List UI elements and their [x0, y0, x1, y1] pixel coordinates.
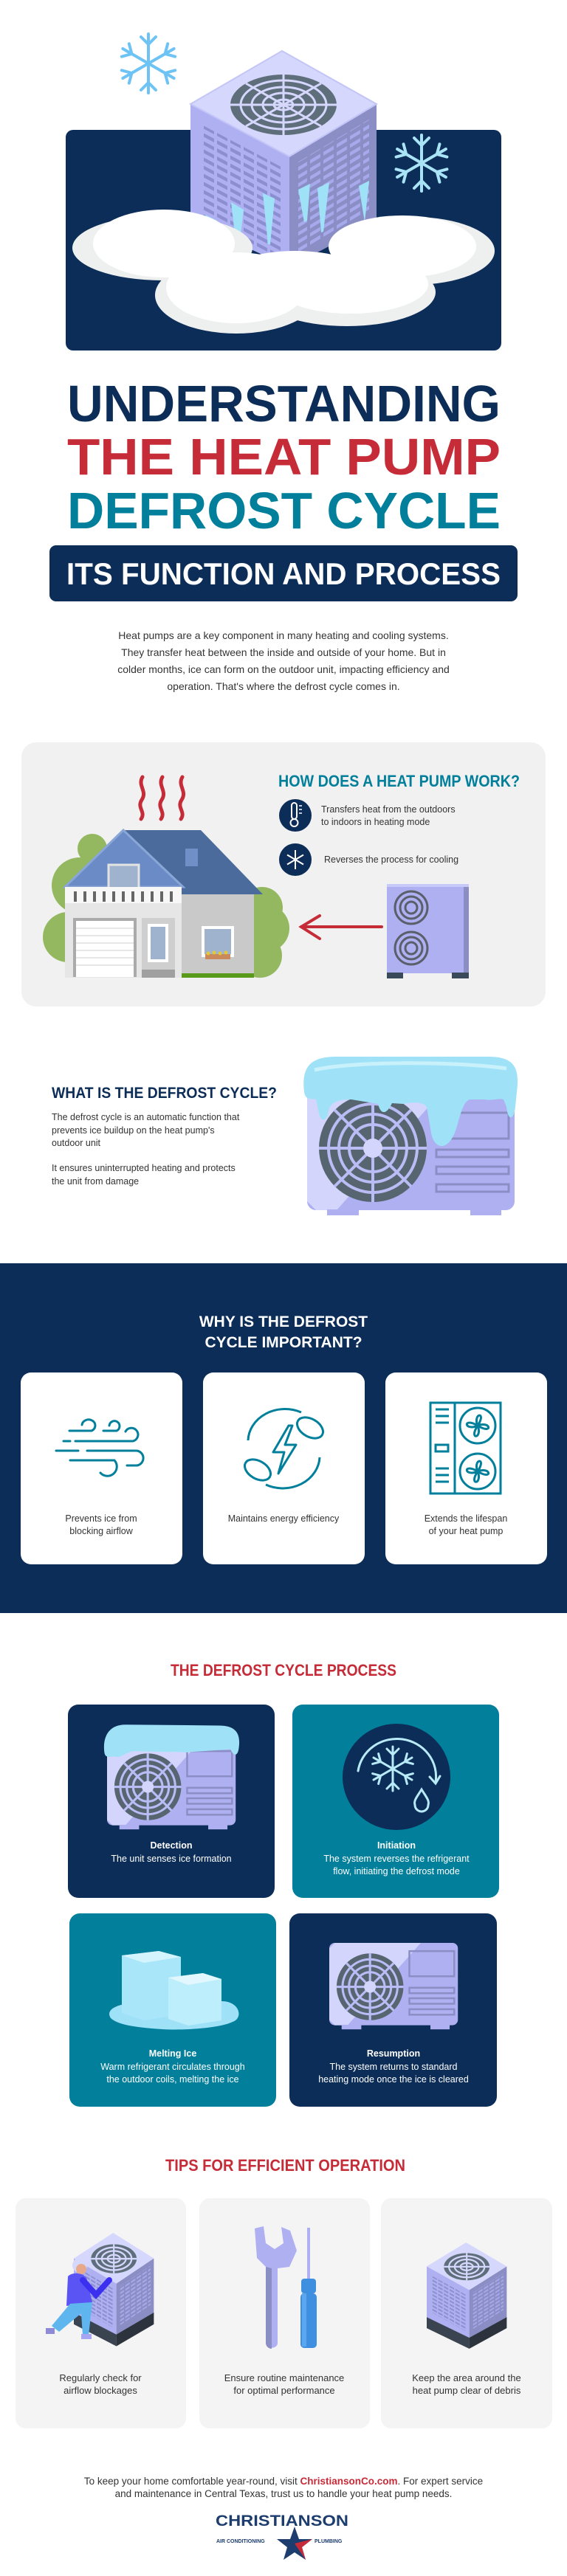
card: resumption	[289, 1913, 497, 2107]
card: tip debris	[381, 2198, 552, 2428]
footer text: and maintenance in Central Texas, trust us to handle your heat pump needs.	[115, 2488, 452, 2499]
intro text: colder months, ice can form on the outdoor unit, impacting efficiency and	[117, 663, 450, 675]
icicles	[205, 181, 369, 246]
card: airflow: Prevents ice from	[65, 1513, 137, 1524]
card: lifespan: of your heat pump	[429, 1526, 503, 1536]
illustration: unit with technician	[74, 2233, 154, 2347]
card: resumption: heating mode once the ice is cleared	[318, 2074, 469, 2085]
hero: heat pump unit	[190, 51, 377, 267]
title: THE HEAT PUMP	[67, 428, 501, 486]
card: tip airflow	[16, 2198, 186, 2428]
heading: tips: TIPS FOR EFFICIENT OPERATION	[165, 2156, 405, 2175]
illustration: wrench and screwdriver	[255, 2226, 317, 2349]
subtitle banner: ITS FUNCTION AND PROCESS	[66, 556, 501, 591]
card: tip debris: heat pump clear of debris	[413, 2385, 521, 2396]
text: transfers heat	[321, 804, 456, 827]
card: lifespan: Extends the lifespan	[425, 1513, 507, 1524]
card: tip maintenance	[199, 2198, 370, 2428]
heading: CYCLE IMPORTANT?	[205, 1334, 362, 1351]
logo: PLUMBING	[315, 2539, 343, 2544]
logo: AIR CONDITIONING	[216, 2539, 265, 2544]
card: airflow	[21, 1372, 182, 1564]
illustration: unit	[427, 2242, 506, 2349]
card: melting ice	[69, 1913, 276, 2107]
card: initiation: The system reverses the refrigerant	[323, 1854, 470, 1864]
title: UNDERSTANDING	[67, 375, 501, 432]
card: melting ice: the outdoor coils, melting the ice	[106, 2074, 239, 2085]
title	[67, 375, 501, 539]
section: why is the defrost cycle important	[0, 1263, 567, 1613]
illustration: iced unit	[104, 1724, 239, 1829]
icon: snowflake with drop	[343, 1724, 450, 1830]
text block	[52, 1112, 240, 1187]
intro text: Heat pumps are a key component in many heating and cooling systems.	[118, 629, 449, 641]
card: tip airflow: Regularly check for	[59, 2372, 142, 2383]
hero: dark panel	[66, 130, 501, 351]
house illustration	[43, 830, 289, 978]
text: transfers heat: to indoors in heating mode	[321, 817, 430, 827]
text block: prevents ice buildup on the heat pump's	[52, 1125, 215, 1136]
icon: snowflake top-left	[119, 34, 178, 93]
heading	[199, 1313, 368, 1351]
hero: snow clouds	[72, 210, 495, 334]
heading: WHY IS THE DEFROST	[199, 1313, 368, 1330]
card: resumption: The system returns to standard	[329, 2062, 458, 2072]
text block: The defrost cycle is an automatic function that	[52, 1112, 240, 1122]
panel: how does a heat pump work	[21, 742, 546, 1006]
card: detection: The unit senses ice formation	[111, 1854, 232, 1864]
heading: WHAT IS THE DEFROST CYCLE?	[52, 1085, 277, 1102]
card: melting ice: Warm refrigerant circulates through	[100, 2062, 245, 2072]
card: resumption: Resumption	[367, 2048, 420, 2059]
title: DEFROST CYCLE	[67, 482, 501, 539]
outdoor unit	[387, 884, 469, 978]
iced unit illustration	[303, 1057, 518, 1215]
card: initiation	[292, 1705, 499, 1898]
card: energy efficiency: Maintains energy efficiency	[228, 1513, 340, 1524]
card: detection	[68, 1705, 275, 1898]
icon: outdoor unit outline	[430, 1403, 501, 1494]
text block: outdoor unit	[52, 1138, 101, 1148]
icon: snowflake right	[394, 135, 450, 191]
logo	[216, 2513, 348, 2560]
card: tip maintenance: for optimal performance	[233, 2385, 335, 2396]
intro text	[117, 629, 450, 692]
icon: thermometer	[279, 799, 312, 832]
card: initiation: flow, initiating the defrost mode	[333, 1866, 460, 1876]
card: tip airflow: airflow blockages	[63, 2385, 137, 2396]
card: energy efficiency	[203, 1372, 365, 1564]
icon: wind	[56, 1420, 143, 1476]
text block: It ensures uninterrupted heating and protects	[52, 1163, 236, 1173]
icon: energy	[241, 1409, 326, 1488]
card: tip maintenance: Ensure routine maintenance	[224, 2372, 344, 2383]
card: tip debris: Keep the area around the	[412, 2372, 521, 2383]
heading: HOW DOES A HEAT PUMP WORK?	[278, 772, 520, 790]
footer text	[84, 2476, 483, 2499]
card: lifespan	[385, 1372, 547, 1564]
card: detection: Detection	[151, 1840, 192, 1851]
illustration: clear unit	[329, 1943, 458, 2029]
card: initiation: Initiation	[377, 1840, 416, 1851]
text: transfers heat: Transfers heat from the outdoors	[321, 804, 456, 815]
footer text: To keep your home comfortable year-round, visit ChristiansonCo.com. For expert service	[84, 2476, 483, 2487]
card: airflow: blocking airflow	[69, 1526, 134, 1536]
section: what is the defrost cycle	[52, 1057, 518, 1215]
icon: snowflake	[279, 843, 312, 876]
illustration: ice cubes	[109, 1951, 238, 2030]
arrow	[301, 916, 382, 939]
subtitle banner	[49, 545, 518, 601]
card: melting ice: Melting Ice	[149, 2048, 196, 2059]
logo: CHRISTIANSON	[216, 2513, 348, 2530]
text block: the unit from damage	[52, 1176, 139, 1187]
intro text: operation. That's where the defrost cycle comes in.	[167, 680, 400, 692]
text: reverses: Reverses the process for cooling	[324, 854, 458, 865]
heat waves	[140, 777, 184, 819]
heading: the defrost cycle process: THE DEFROST CYCLE PROCESS	[171, 1661, 396, 1679]
intro text: They transfer heat between the inside and outside of your home. But in	[121, 646, 446, 658]
